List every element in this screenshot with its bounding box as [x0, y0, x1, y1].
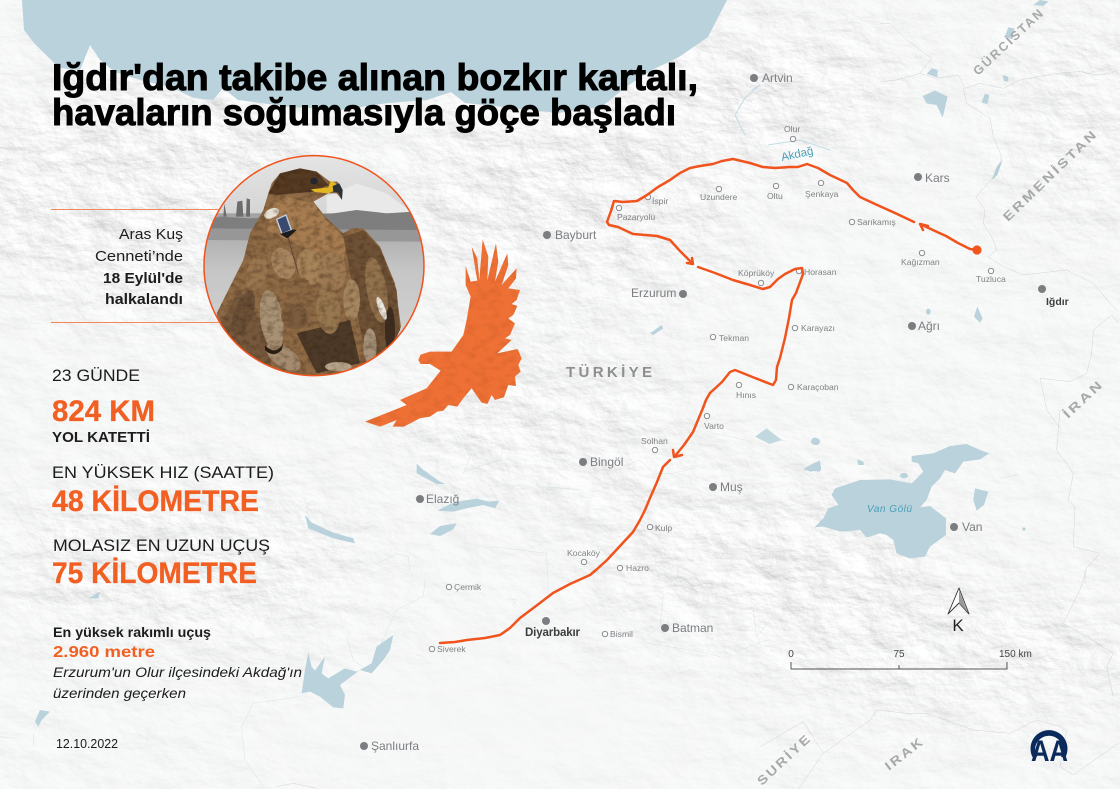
district labels: Kulp — [655, 523, 672, 533]
district labels: Olur — [784, 124, 800, 134]
logo: AA: AA — [1031, 735, 1068, 768]
river: Çoruh — [735, 85, 830, 150]
stat: top speed — [52, 463, 274, 518]
major city labels: Kars — [925, 171, 950, 185]
borders — [880, 23, 1119, 430]
district labels: Bismil — [610, 629, 633, 639]
north arrow — [948, 588, 969, 635]
route start point — [972, 245, 982, 255]
feathers — [297, 248, 320, 284]
district labels: Karayazı — [801, 323, 835, 333]
district labels: Tuzluca — [976, 274, 1006, 284]
district labels: Şenkaya — [805, 189, 839, 199]
water labels: Van Gölü — [867, 504, 912, 515]
stat: highest altitude — [53, 625, 302, 701]
stat: top speed: 48 KİLOMETRE — [52, 485, 259, 518]
major city labels: Artvin — [762, 71, 793, 85]
rivers and dams: south-west — [0, 500, 425, 788]
caption: ringing date: 18 Eylül'de — [103, 271, 183, 287]
major city labels: Van — [962, 520, 982, 534]
scale bar — [788, 649, 1032, 669]
stat: longest non-stop flight — [52, 536, 270, 590]
stat: highest altitude: 2.960 metre — [53, 644, 155, 661]
north arrow: K — [952, 616, 964, 635]
district labels: Tekman — [719, 333, 749, 343]
caption: ringing date: Aras Kuş — [119, 227, 183, 243]
district labels: Kağızman — [901, 257, 940, 267]
stat: distance: 824 KM — [52, 395, 155, 428]
water labels — [780, 145, 912, 515]
district labels: Sarıkamış — [857, 217, 896, 227]
major city labels: Bayburt — [555, 228, 597, 242]
stat: highest altitude: üzerinden geçerken — [53, 685, 186, 701]
district labels: Uzundere — [700, 192, 737, 202]
route segment and arrow: start to Sarıkamış — [920, 224, 977, 250]
satellite tag — [277, 215, 291, 234]
migration route — [440, 159, 982, 643]
country labels — [566, 4, 1107, 788]
major city labels: Bingöl — [590, 455, 623, 469]
country labels: İRAN — [1060, 376, 1107, 421]
district labels: Varto — [704, 421, 724, 431]
country labels: GÜRCİSTAN — [970, 4, 1047, 78]
route segment and arrow: Akdağ to Erzurum — [607, 159, 914, 264]
stat: distance — [52, 366, 155, 446]
rivers and lakes: central — [417, 317, 820, 657]
district labels: İspir — [652, 196, 668, 206]
date: 12.10.2022 — [56, 736, 118, 751]
district labels: Siverek — [437, 644, 466, 654]
country labels: IRAK — [882, 734, 927, 773]
caption: ringing date: Cenneti’nde — [95, 249, 183, 265]
beak and eye — [311, 181, 336, 193]
stat: distance: 23 GÜNDE — [52, 366, 140, 385]
photo: tagged steppe eagle — [200, 150, 433, 383]
district labels: Köprüköy — [738, 268, 775, 278]
stat: longest non-stop flight: 75 KİLOMETRE — [52, 557, 257, 590]
stat: longest non-stop flight: MOLASIZ EN UZUN UÇUŞ — [53, 536, 270, 555]
lake: Van Gölü — [780, 438, 1026, 558]
leader lines for caption — [51, 209, 219, 323]
bird silhouette — [365, 240, 522, 427]
feather texture — [217, 170, 400, 375]
stat: distance: YOL KATETTİ — [52, 429, 150, 446]
stat: top speed: EN YÜKSEK HIZ (SAATTE) — [52, 463, 274, 482]
district labels: Kocaköy — [567, 548, 601, 558]
eagle body — [217, 168, 401, 383]
scale bar: 150 km — [999, 649, 1032, 660]
title — [52, 57, 698, 133]
route segment: Solhan to Siverek — [440, 460, 670, 643]
major city labels: Iğdır — [1046, 296, 1069, 308]
caption: ringing date — [95, 227, 183, 308]
title: havaların soğumasıyla göçe başladı — [52, 92, 676, 133]
district labels: Horasan — [804, 267, 837, 277]
major city labels: Ağrı — [918, 319, 940, 333]
major city labels: Şanlıurfa — [371, 739, 419, 753]
major city labels: Muş — [720, 480, 743, 494]
country labels: SURİYE — [754, 730, 815, 788]
district labels — [429, 124, 1006, 654]
district labels: Hazro — [626, 563, 649, 573]
district labels: Hınıs — [736, 390, 756, 400]
country labels: TÜRKİYE — [566, 364, 652, 381]
caption: ringing date: halkalandı — [105, 292, 183, 308]
lakes and rivers: north-east — [917, 0, 1090, 323]
district labels: Çermik — [454, 582, 482, 592]
district labels: Oltu — [767, 191, 783, 201]
country labels: ERMENİSTAN — [1000, 126, 1101, 224]
title: Iğdır'dan takibe alınan bozkır kartalı, — [52, 57, 698, 98]
stat: highest altitude: En yüksek rakımlı uçuş — [53, 625, 211, 640]
district labels: Solhan — [641, 436, 668, 446]
water labels: Akdağ — [780, 145, 815, 164]
scale bar: 75 — [893, 649, 905, 660]
district labels: Karaçoban — [797, 382, 839, 392]
sea: Karadeniz — [22, 0, 727, 113]
stat: highest altitude: Erzurum'un Olur ilçesindeki Akdağ'ın — [53, 664, 302, 680]
district labels: Pazaryolu — [617, 212, 655, 222]
route segment: Köprüköy to Horasan and Hınıs — [673, 267, 803, 457]
scale bar: 0 — [788, 649, 794, 660]
major city labels — [360, 71, 1069, 753]
major city labels: Elazığ — [426, 492, 459, 506]
major city labels: Erzurum — [631, 286, 676, 300]
major city labels: Diyarbakır — [525, 627, 581, 639]
major city labels: Batman — [672, 621, 713, 635]
